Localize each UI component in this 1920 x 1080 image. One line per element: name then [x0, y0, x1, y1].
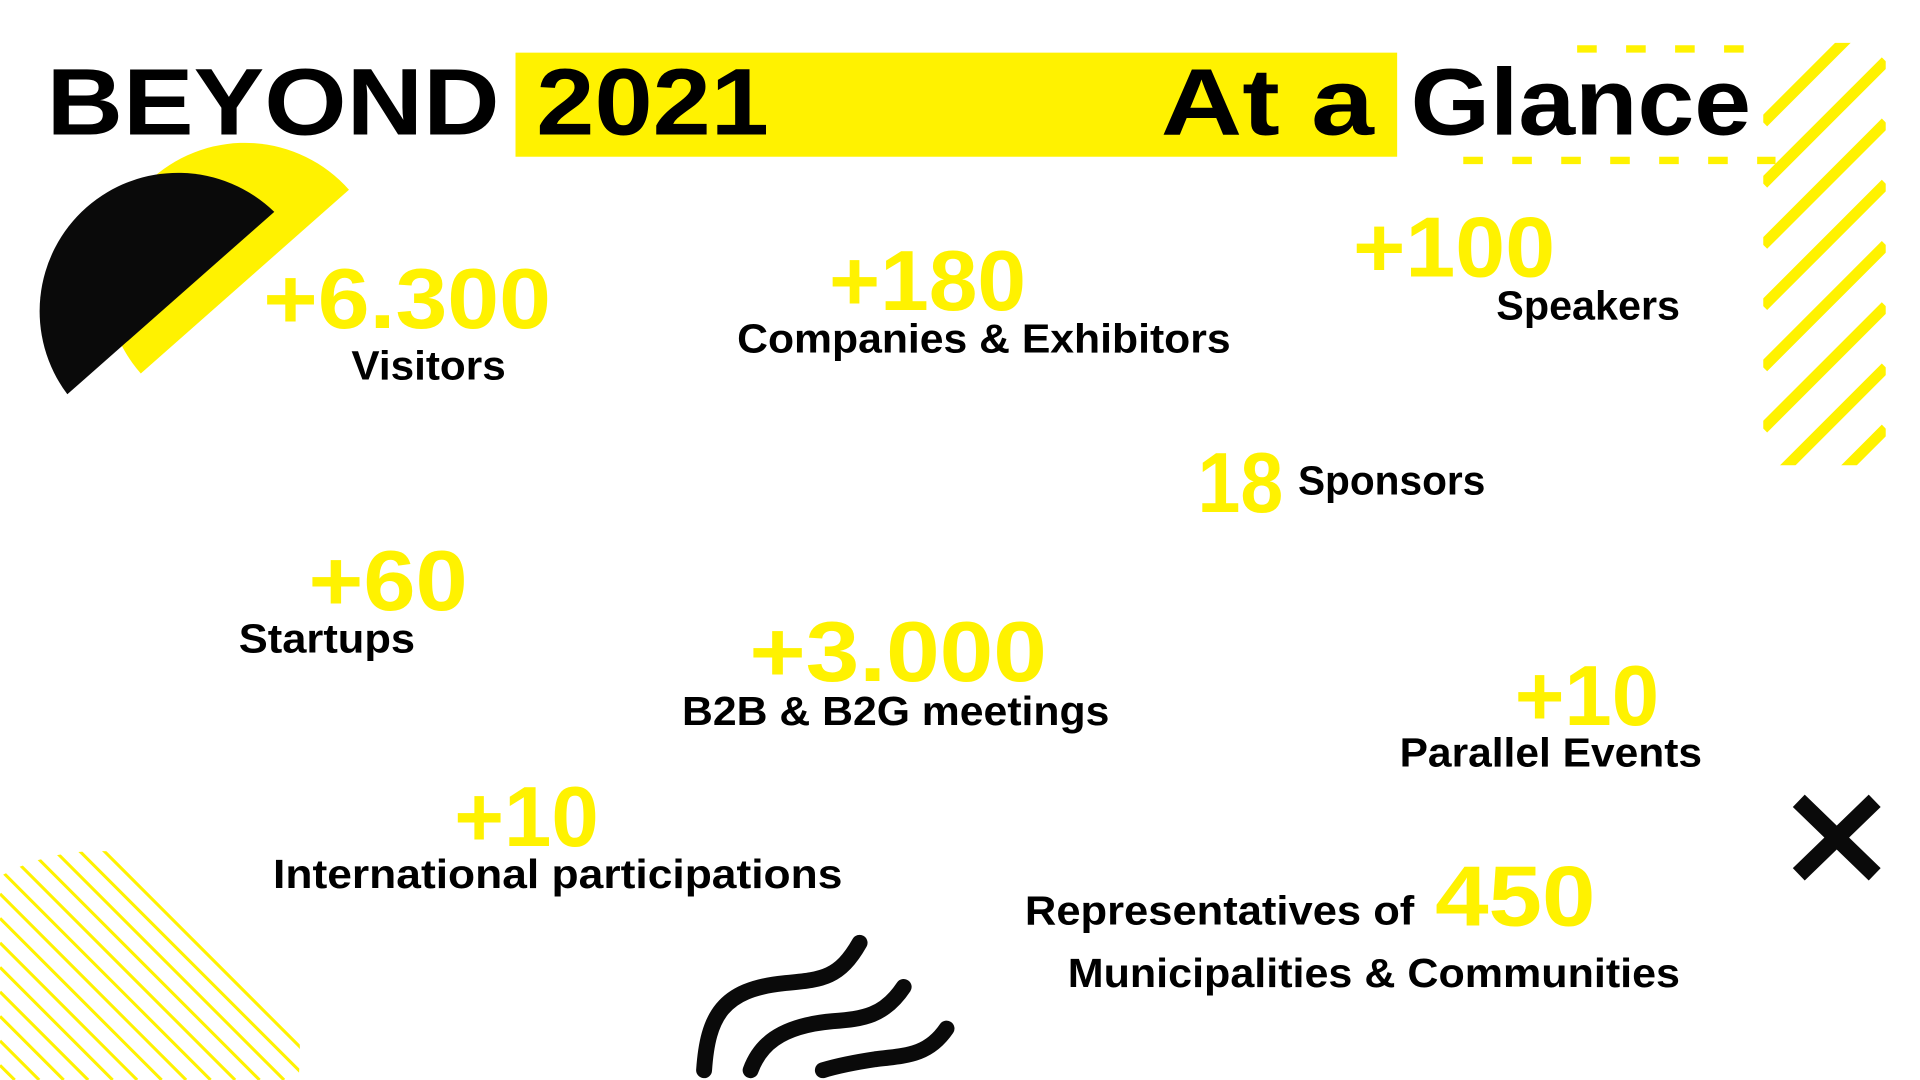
icon: X mark [1799, 801, 1875, 874]
stat: speakers [1353, 200, 1680, 329]
stat: parallel events [1400, 648, 1702, 776]
stat: companies [737, 233, 1231, 362]
stat: B2B: +3.000 [749, 604, 1047, 700]
title banner: BEYOND [47, 50, 500, 155]
stat: international [273, 769, 842, 897]
stat: B2B [682, 604, 1109, 734]
stat: startups: +60 [309, 533, 468, 629]
stat: visitors: +6.300 [263, 251, 551, 347]
stat: parallel events: Parallel Events [1400, 730, 1702, 776]
stat: municipalities: 450 [1435, 849, 1596, 945]
stat: sponsors: Sponsors [1298, 458, 1485, 504]
title banner [47, 50, 1751, 157]
stat: visitors: Visitors [351, 343, 506, 389]
stat: speakers: +100 [1353, 200, 1555, 296]
stat: municipalities: Municipalities & Communities [1068, 950, 1680, 996]
stat: companies: Companies & Exhibitors [737, 316, 1231, 362]
stat: sponsors: 18 [1198, 435, 1283, 531]
icon: waves [704, 943, 947, 1070]
stat: visitors [263, 251, 551, 389]
stat: startups [239, 533, 468, 662]
stat: international: International participations [273, 851, 842, 897]
icon: half circles [40, 143, 349, 394]
stat: international: +10 [454, 769, 599, 865]
stat: municipalities: Representatives of [1025, 887, 1415, 933]
decoration: dashed lines [1463, 49, 1776, 160]
stat: companies: +180 [829, 233, 1026, 329]
stat: sponsors [1198, 435, 1485, 531]
title banner: 2021 [536, 50, 769, 155]
title banner: At a [1161, 50, 1376, 155]
stat: B2B: B2B & B2G meetings [682, 688, 1109, 734]
stat: municipalities [1025, 849, 1680, 996]
decoration: right diagonal stripes [1763, 42, 1886, 466]
stat: parallel events: +10 [1515, 648, 1659, 744]
stat: startups: Startups [239, 616, 415, 662]
title banner: Glance [1411, 50, 1751, 155]
stat: speakers: Speakers [1496, 283, 1680, 329]
decoration: striped circle [0, 851, 300, 1080]
